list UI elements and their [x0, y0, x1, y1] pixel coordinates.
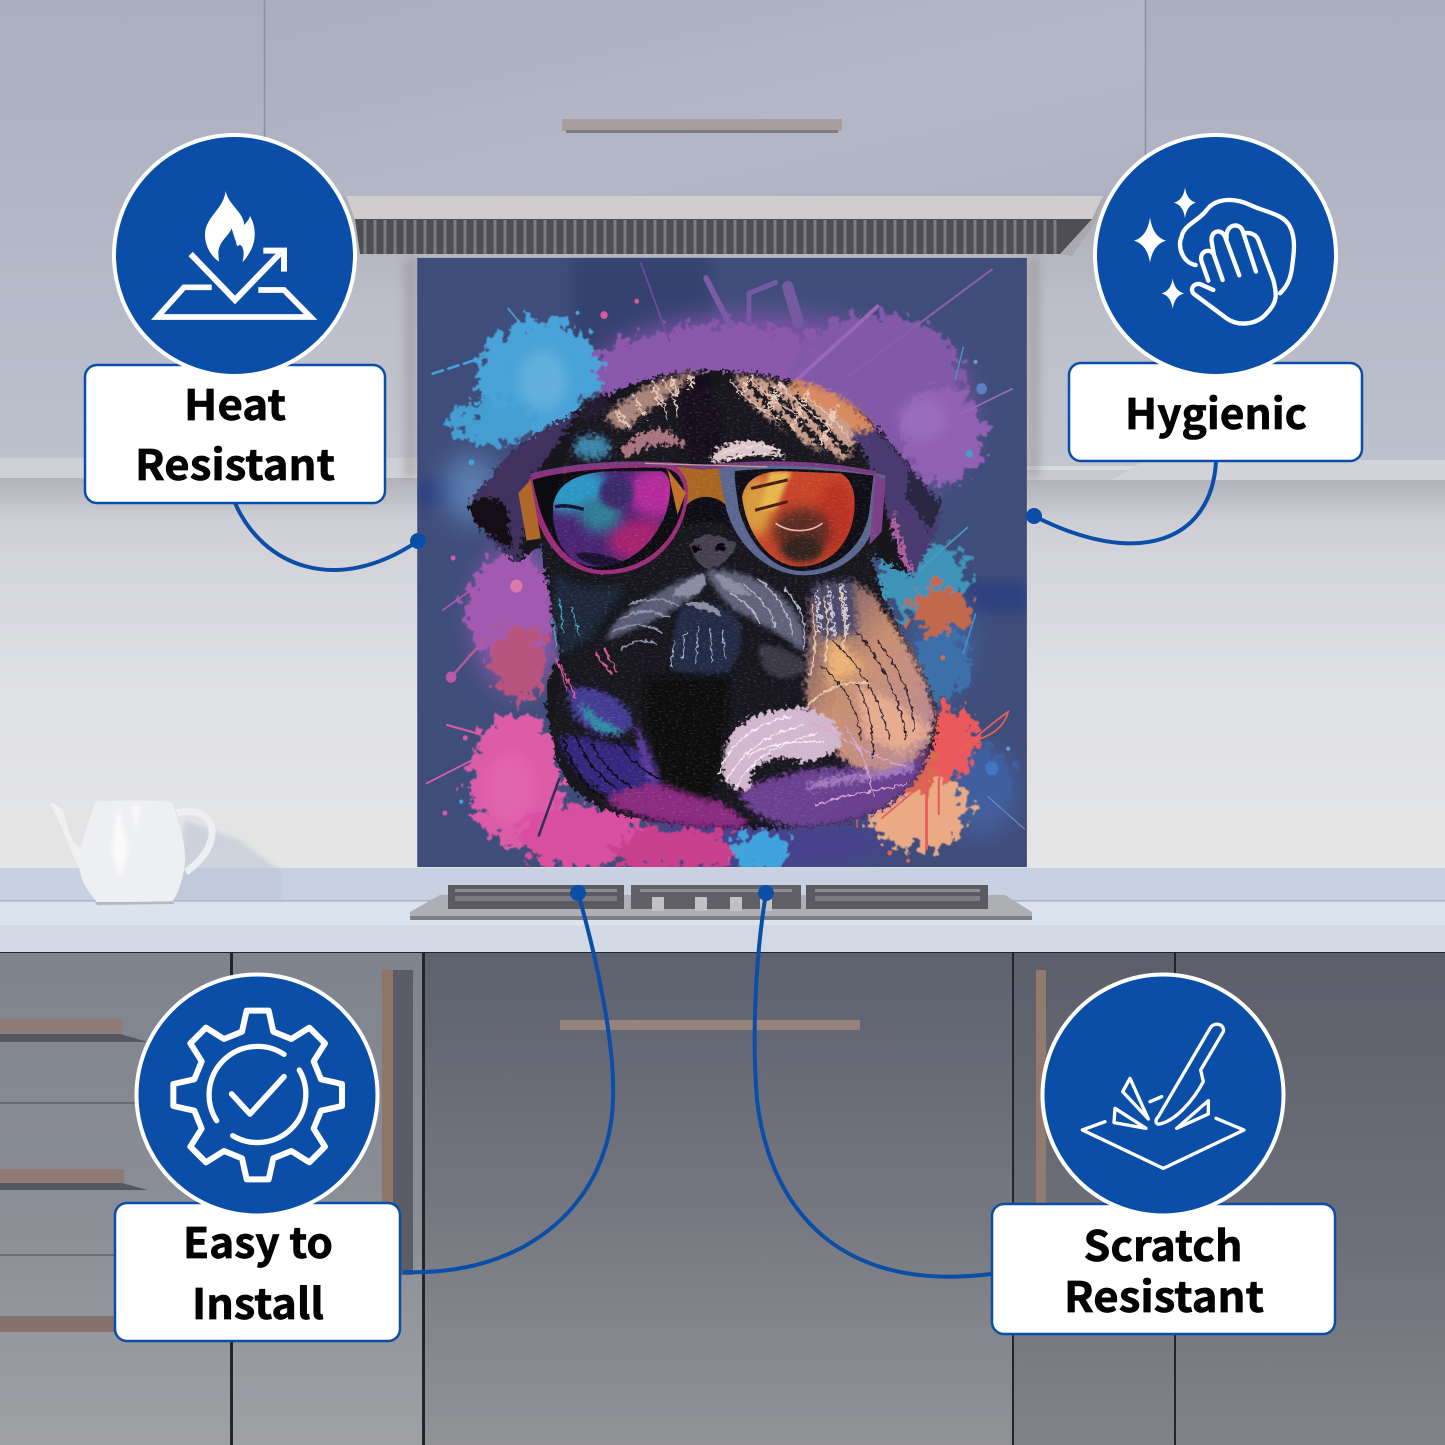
teapot — [49, 800, 282, 905]
glass splashback panel: pug with sunglasses — [417, 258, 1027, 875]
panel edge shadows — [405, 258, 1039, 478]
fur texture overlay — [541, 376, 935, 827]
connector: easy to install — [403, 885, 613, 1272]
icon: gear with check — [173, 1011, 342, 1179]
heading: Scratch — [1084, 1213, 1242, 1274]
callout: easy to install — [115, 974, 400, 1341]
sunglasses — [518, 462, 886, 575]
connector: scratch resistant — [755, 885, 991, 1277]
paint specks — [442, 299, 1010, 863]
right frame — [718, 462, 886, 575]
callout: hygienic — [1069, 135, 1362, 461]
pug fur layers — [469, 371, 941, 828]
left lens — [553, 471, 670, 566]
icon circle — [136, 974, 378, 1216]
lower cabinet left drawers — [0, 953, 230, 1445]
lower cabinet left door — [233, 953, 422, 1445]
pug body and head silhouette — [469, 371, 939, 828]
top bar — [531, 463, 876, 476]
shelf left — [0, 458, 418, 478]
snout and muzzle — [553, 535, 808, 801]
paint drips and streaks — [427, 263, 1024, 849]
left frame — [529, 462, 688, 574]
fur detail strokes — [553, 378, 914, 805]
upper cabinet left — [0, 0, 264, 458]
label box — [85, 365, 385, 503]
callout: heat resistant — [85, 135, 385, 503]
ears — [469, 400, 941, 575]
upper cabinet centre — [265, 0, 1145, 196]
arms — [518, 480, 541, 541]
upper cabinet right — [1146, 0, 1445, 460]
extractor hood — [346, 196, 1104, 256]
icon circle — [1095, 135, 1336, 376]
cabinet gaps — [0, 952, 1445, 1445]
paint highlights — [486, 350, 947, 822]
icon circle — [1042, 974, 1284, 1216]
callout: scratch resistant — [992, 974, 1335, 1334]
heading line two: Resistant — [135, 432, 335, 493]
panel background — [417, 258, 1027, 867]
right lens — [742, 471, 855, 567]
reflections — [417, 258, 1027, 612]
heading: Heat — [184, 372, 286, 433]
lower cabinet right door — [1014, 953, 1174, 1445]
chest fur: left side — [559, 687, 751, 828]
icon circle — [114, 135, 355, 376]
paint splashes — [447, 315, 1012, 875]
heading: Hygienic — [1125, 381, 1307, 442]
upper handle — [562, 119, 842, 133]
heading: Easy to — [183, 1210, 333, 1271]
orange hinge left — [667, 469, 686, 515]
icon: knife scratching surface — [1082, 1024, 1244, 1168]
bridge — [676, 467, 726, 505]
lower cabinet far right — [1176, 953, 1445, 1445]
chest fur: right side — [722, 580, 935, 827]
drawer lines — [0, 1103, 230, 1255]
heading line two: Install — [192, 1271, 324, 1332]
wall behind hood — [264, 196, 1184, 466]
label box — [992, 1204, 1335, 1334]
connector: hygienic — [1026, 461, 1216, 543]
cabinet handles — [0, 970, 1046, 1332]
cooktop — [410, 885, 1032, 920]
wall — [0, 470, 1445, 870]
countertop — [0, 868, 1445, 953]
label box — [1069, 363, 1362, 461]
label box — [115, 1203, 400, 1341]
forehead wrinkles and tan fur — [573, 372, 876, 636]
icon: flame on surface — [157, 191, 311, 317]
icon: hand wiping with sparkles — [1134, 187, 1294, 324]
lower cabinet centre door — [425, 953, 1012, 1445]
heading line two: Resistant — [1064, 1264, 1264, 1325]
soft paint wash — [443, 315, 1016, 866]
shelf right — [1112, 460, 1445, 480]
connector: heat resistant — [235, 503, 426, 570]
